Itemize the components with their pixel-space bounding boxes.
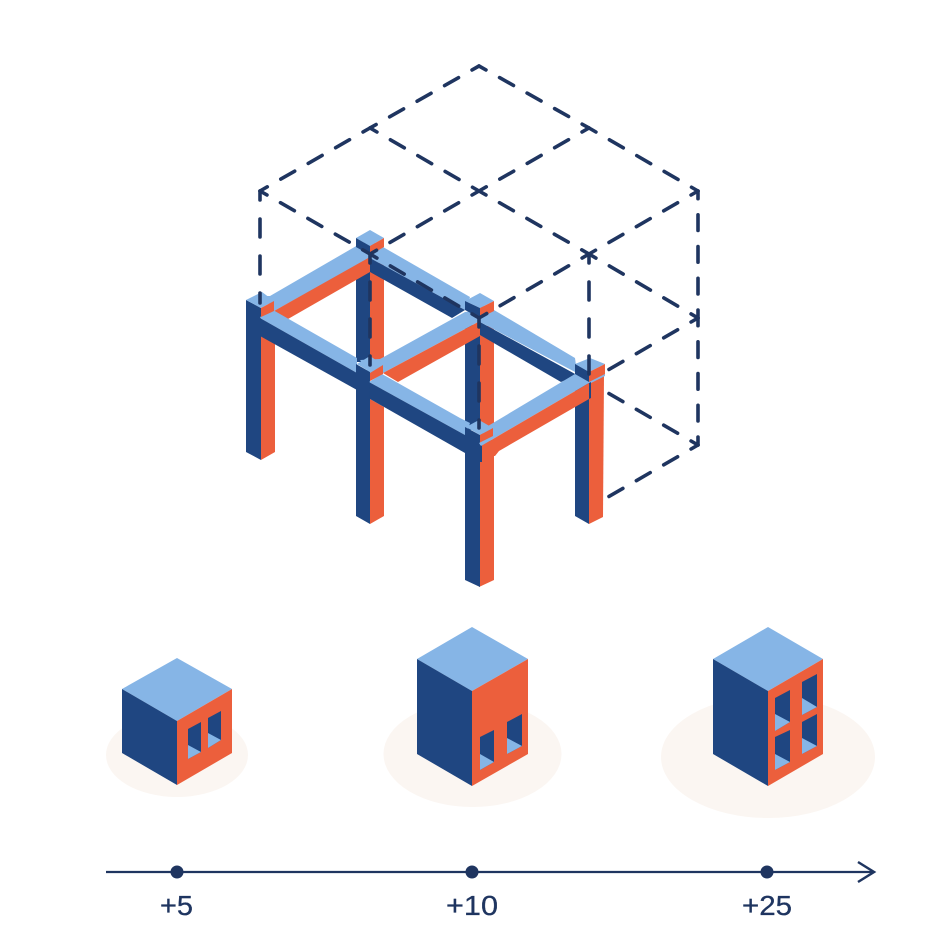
timeline axis with arrow [106,862,874,882]
back posts [356,260,494,436]
beam: front right [480,372,605,456]
large building +25 [661,627,875,818]
ground ellipse [106,713,248,797]
beam: back right [370,240,470,318]
beam: middle cross [360,310,480,382]
label +25: +25 [742,890,792,921]
post: right corner [575,364,604,524]
beam: front left [260,310,357,390]
caps on column tops [246,230,605,446]
beam: front middle [369,374,470,453]
post: front corner [465,427,494,587]
medium building +10 [384,627,562,807]
beam: right side [480,305,577,382]
beam: back left [262,240,370,319]
dashed guides behind the frame [589,318,698,508]
label +10: +10 [446,890,498,921]
post: front middle [356,364,384,524]
label +5: +5 [160,890,193,921]
structural frame [246,230,605,587]
ground ellipse [661,696,875,818]
post: front left corner [246,300,275,460]
small building +5 [106,658,248,797]
ground ellipse [384,701,562,807]
dashed wireframe cube [260,66,698,445]
